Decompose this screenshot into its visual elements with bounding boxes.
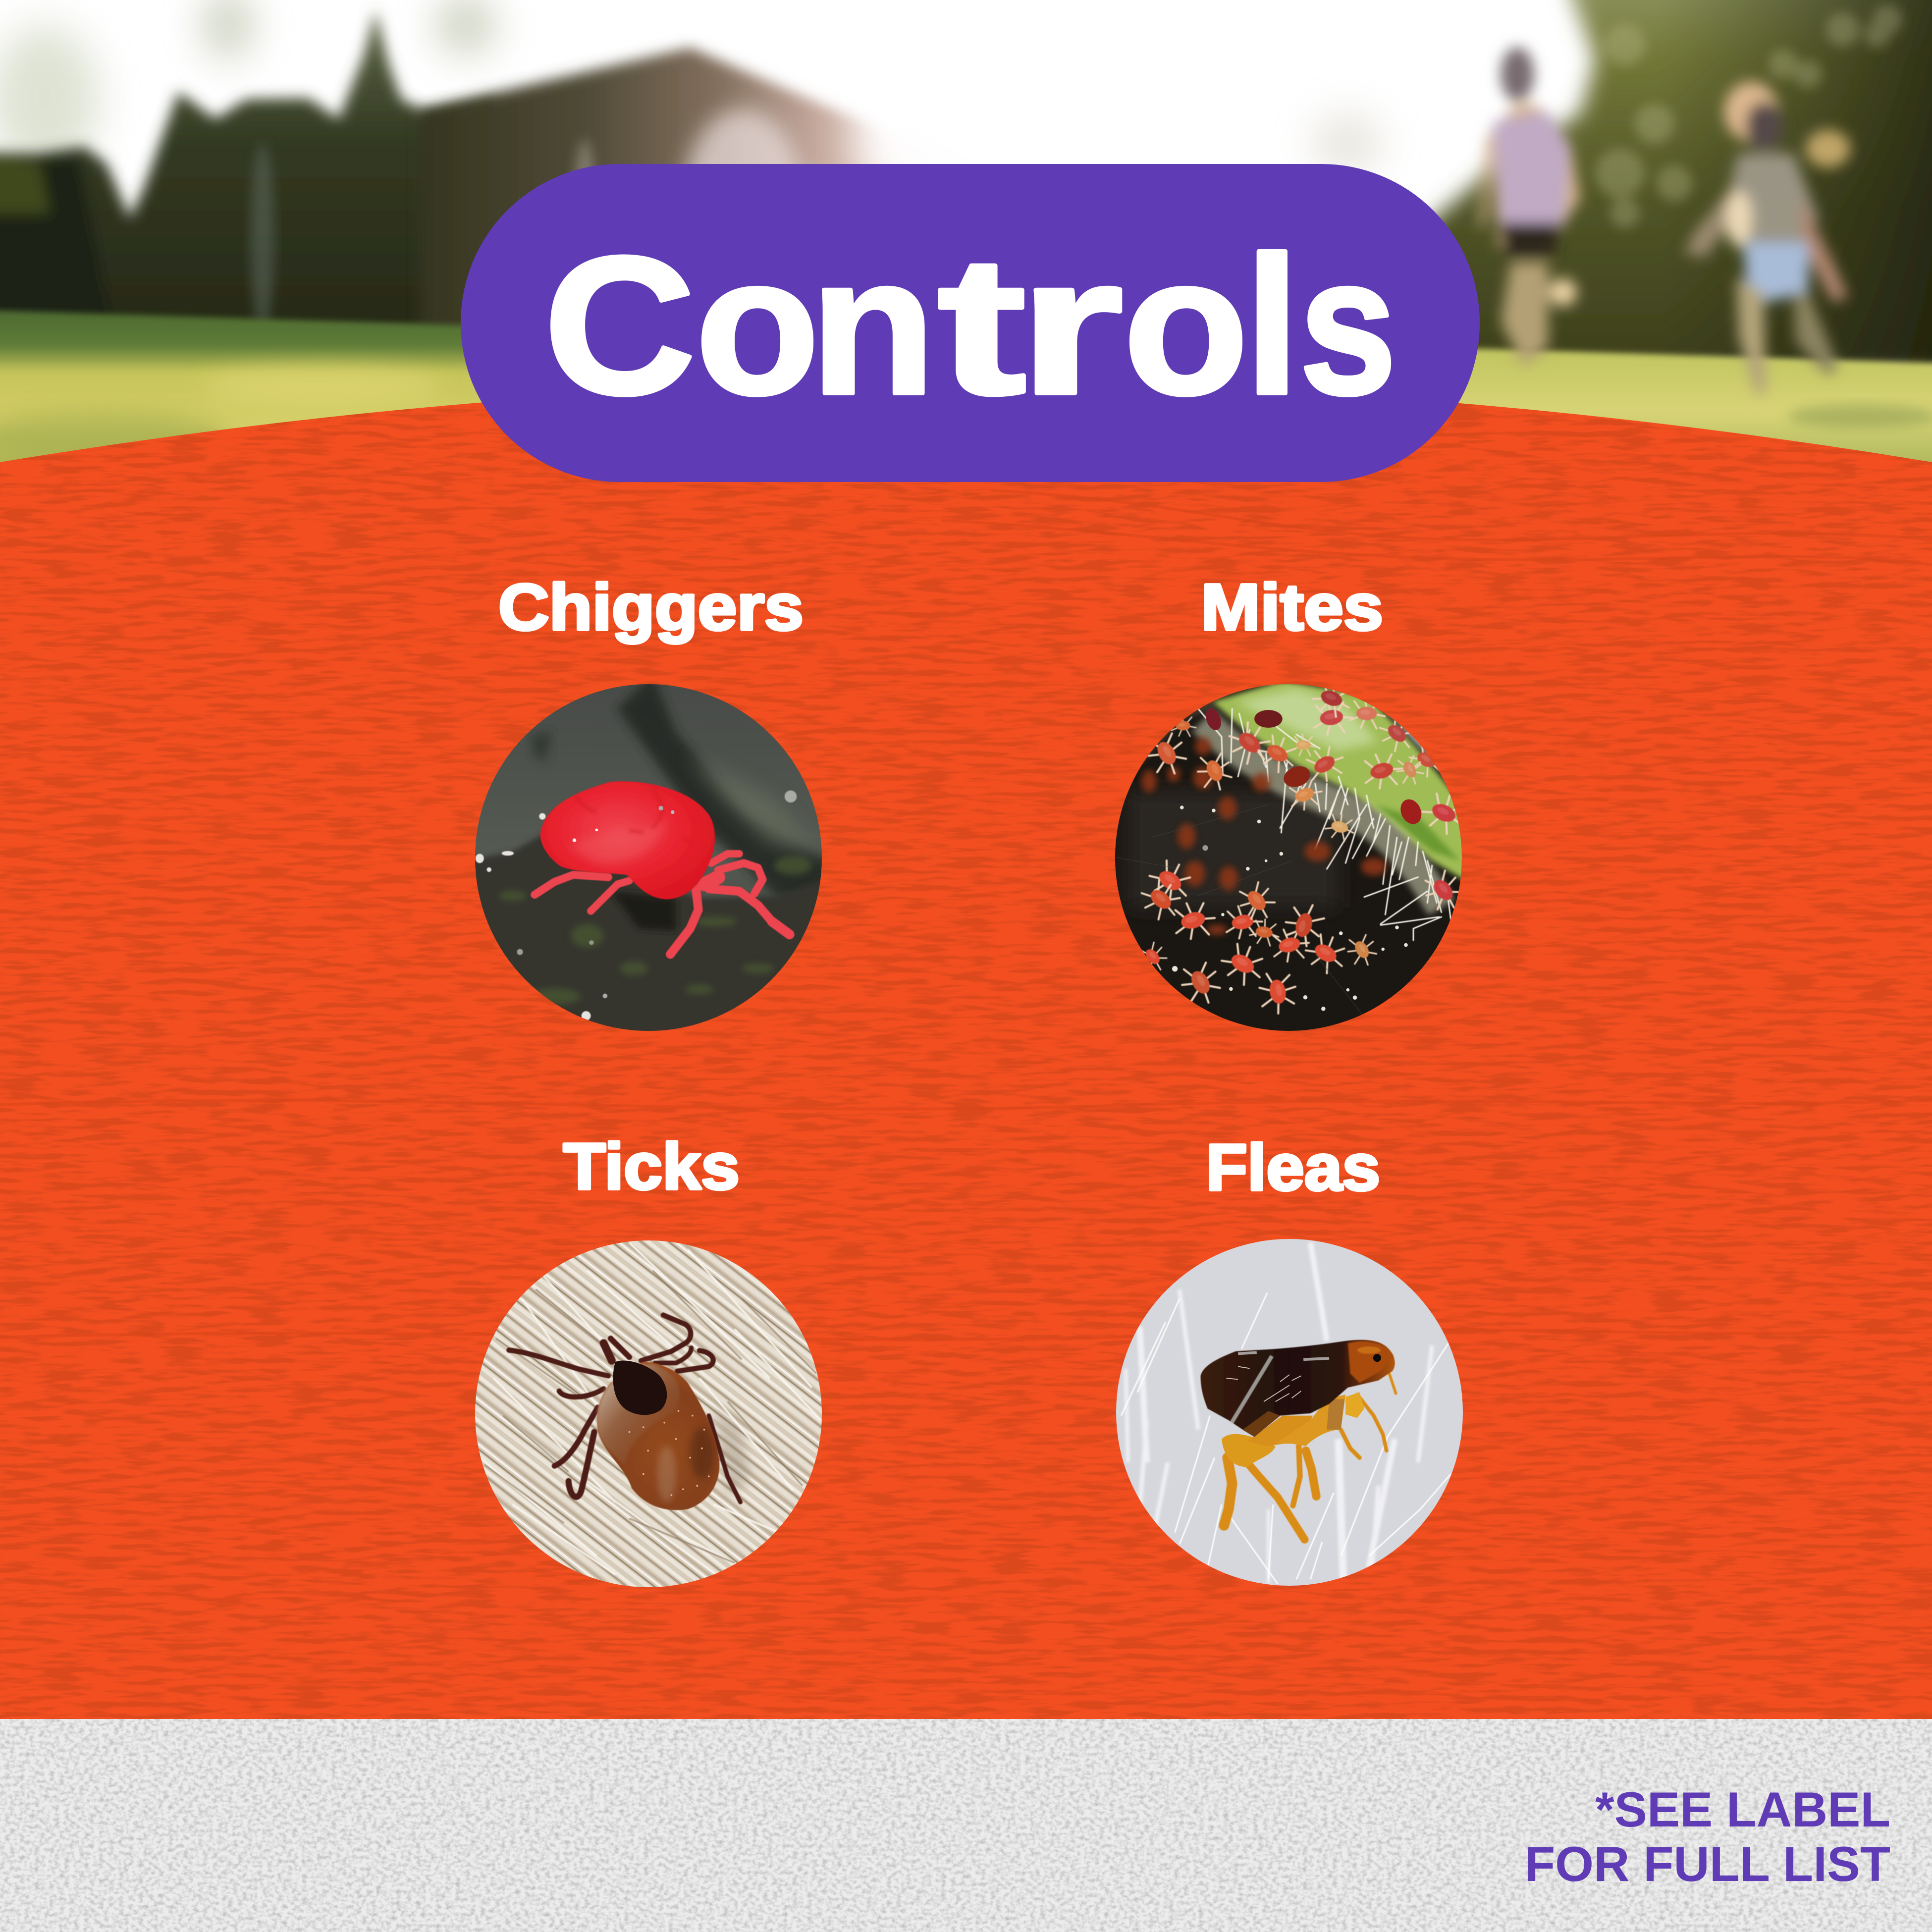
title text: C [544, 216, 696, 435]
dark fed mites [1203, 706, 1425, 827]
title text: r [1019, 216, 1124, 435]
footnote: see label for full list: *SEE LABEL [1595, 1782, 1890, 1837]
background photo: backyard with children running [0, 0, 1932, 476]
photo circle: flea on white hair [1105, 1229, 1471, 1595]
photo circle: engorged tick on fur [466, 1229, 832, 1595]
title text: l [1245, 216, 1299, 435]
child in lilac shirt [1479, 47, 1580, 367]
tick scutum [613, 1361, 667, 1415]
photo circle: spider mites on leaf stem [1115, 684, 1462, 1031]
footnote: see label for full list [1525, 1782, 1890, 1891]
title text: s [1299, 216, 1396, 435]
hazy distant foliage [0, 0, 1382, 173]
house with sun flare [419, 48, 971, 337]
tick legs [509, 1315, 741, 1502]
photo circle: red chigger on bark [475, 684, 822, 1031]
child in blue shorts [1684, 82, 1850, 396]
heading: Mites: Mites [1201, 571, 1383, 644]
mite cluster [1134, 677, 1471, 1016]
heading: Ticks: Ticks [563, 1130, 740, 1203]
title text: o [696, 216, 819, 435]
title text: t [937, 216, 1026, 435]
grey plaster footer band [0, 1719, 1932, 1932]
flea body [1201, 1340, 1395, 1437]
heading: Fleas: Fleas [1206, 1131, 1380, 1204]
leaf hairs [1198, 709, 1451, 940]
title text: o [1124, 216, 1248, 435]
orange wood panel with curved top [0, 381, 1932, 1719]
title pill [461, 164, 1480, 482]
right tree line [1417, 0, 1932, 376]
heading: Chiggers: Chiggers [498, 571, 804, 644]
pale hair haze along stem edge [1203, 720, 1442, 908]
out-of-focus mites [1142, 737, 1386, 935]
left tree line silhouette [0, 10, 545, 337]
title text: n [810, 216, 935, 435]
right lawn [1417, 347, 1932, 476]
footnote: see label for full list: FOR FULL LIST [1525, 1836, 1890, 1891]
tick abdomen [597, 1362, 719, 1510]
left lawn [0, 310, 515, 476]
flea legs [1224, 1374, 1396, 1540]
